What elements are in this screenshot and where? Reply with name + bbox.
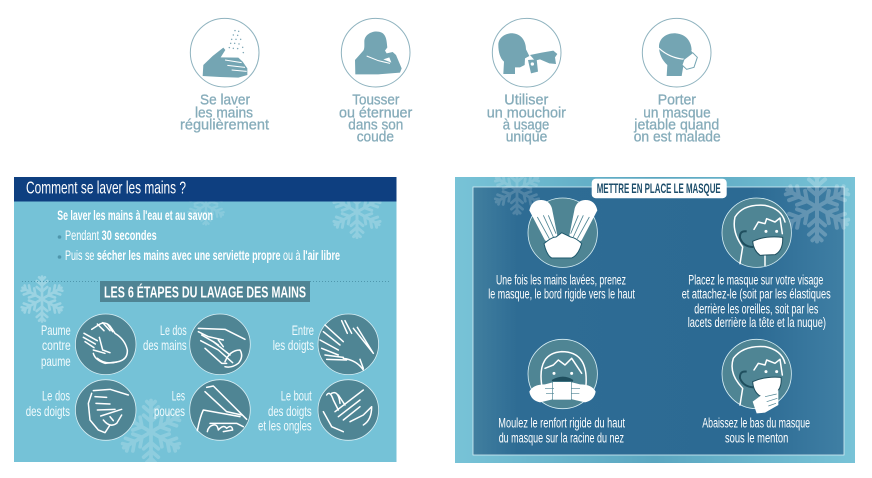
title pill: METTRE EN PLACE LE MASQUE [597,180,721,196]
title pill [592,179,727,198]
caption: masque: Porter [658,93,696,109]
step: bout des doigts: Le bout [281,388,312,404]
snowflakes right panel [494,177,850,244]
heading: 6 étapes: LES 6 ÉTAPES DU LAVAGE DES MAINS [104,282,306,302]
step 4: abaisser le masque: Abaissez le bas du masque [702,416,810,431]
heading: 6 étapes [100,281,310,302]
panel header [14,177,396,202]
step: le dos des mains: des mains [143,337,187,353]
step: entre les doigts: les doigts [273,337,314,353]
icon: tissue [492,18,561,87]
step: entre les doigts: Entre [292,322,314,338]
step: le dos des doigts [26,380,136,440]
step: paume contre paume: Paume [41,322,71,338]
step: paume contre paume [41,314,136,375]
step 1: prendre le masque: Une fois les mains lavées, prenez [496,273,626,288]
caption: mouchoir: unique [506,130,547,146]
caption: mouchoir [487,93,566,146]
step 4: abaisser le masque [702,339,810,445]
step: le dos des doigts: des doigts [26,403,70,419]
caption: tousser: dans son [348,117,403,133]
caption: tousser [339,93,412,146]
caption: se laver les mains [180,93,269,133]
instructions: Se laver les mains à l'eau et au savon [57,208,213,223]
caption: se laver les mains: les mains [195,105,253,121]
panel header: Comment se laver les mains ? [26,178,186,198]
step: bout des doigts [258,380,379,440]
step 3: mouler le renfort [498,339,625,445]
caption: masque: on est malade [634,130,721,146]
panel: comment se laver les mains [14,177,396,464]
caption: mouchoir: Utiliser [504,93,548,109]
caption: se laver les mains: régulièrement [180,117,269,133]
panel: mettre en place le masque [455,166,855,463]
caption: masque: un masque [643,105,711,121]
step: les pouces [154,380,250,440]
step 3: mouler le renfort: Moulez le renfort rigide du haut [498,416,625,431]
caption: tousser: ou éternuer [339,105,412,121]
caption: tousser: Tousser [352,93,399,109]
caption: mouchoir: un mouchoir [487,105,566,121]
step: paume contre paume: paume [41,353,71,369]
step 3: mouler le renfort: du masque sur la racine du nez [499,430,624,445]
step: bout des doigts: des doigts [268,403,312,419]
step: le dos des doigts: Le dos [42,388,70,404]
step: bout des doigts: et les ongles [258,418,312,434]
snowflakes left panel [20,186,382,464]
step 1: prendre le masque [488,198,635,302]
step 2: attacher le masque [682,198,831,330]
caption: mouchoir: à usage [503,117,549,133]
step: entre les doigts [273,314,379,375]
instructions [57,208,340,263]
step: paume contre paume: contre [42,337,71,353]
step: les pouces: pouces [154,403,185,419]
step: le dos des mains [143,314,250,375]
icon: washing hands [190,18,259,87]
caption: tousser: coude [357,130,394,146]
caption: se laver les mains: Se laver [200,93,250,109]
step 1: prendre le masque: le masque, le bord rigide vers le haut [488,287,635,302]
icon: mask wearer [642,18,711,87]
icon: coughing in elbow [341,18,410,87]
caption: masque [633,93,721,146]
step: les pouces: Les [172,388,185,404]
step 4: abaisser le masque: sous le menton [725,430,788,445]
instructions: Pendant 30 secondes [65,228,157,243]
instructions: Puis se sécher les mains avec une serviette propre ou à l'air libre [65,248,340,263]
step: le dos des mains: Le dos [160,322,187,338]
caption: masque: jetable quand [633,117,719,133]
